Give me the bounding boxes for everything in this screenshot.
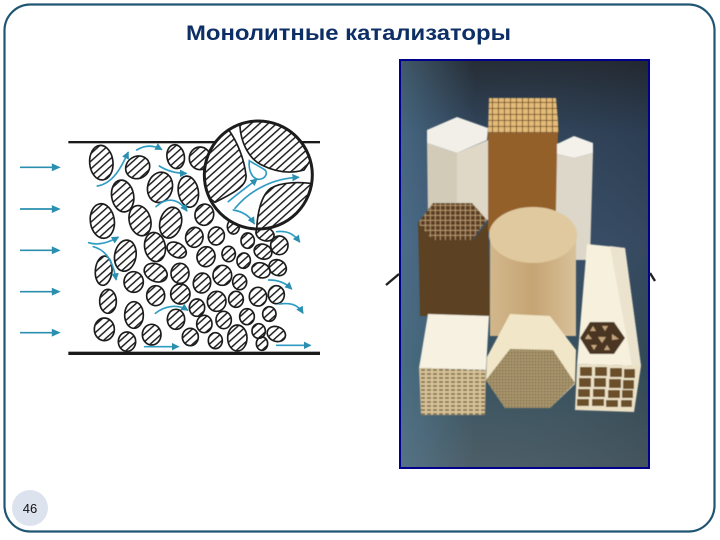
white hexagonal monolith, back left	[427, 117, 488, 220]
diagram: flow through packed bed	[20, 120, 320, 355]
inlet flow arrows	[20, 165, 59, 335]
page number	[12, 490, 48, 526]
small triangular-cell hexagon	[580, 322, 625, 354]
page number: 46	[23, 501, 37, 516]
reactor walls	[68, 141, 320, 355]
flow streamlines	[89, 146, 310, 347]
catalyst particles	[88, 144, 289, 352]
photo: monolith catalysts	[400, 60, 649, 468]
long white monolith with grid face	[575, 244, 641, 412]
cylindrical monolith	[489, 207, 577, 336]
magnifier lens	[202, 120, 314, 230]
title: Монолитные катализаторы	[186, 22, 511, 45]
white square monolith with grid	[419, 314, 489, 415]
hexagonal monolith, fine cell	[486, 314, 576, 408]
dark hexagonal monolith	[418, 203, 490, 316]
white hexagonal monolith, back right	[555, 136, 593, 260]
arrow fragments beside photo	[386, 273, 655, 285]
brown square monolith, back centre	[488, 98, 559, 232]
